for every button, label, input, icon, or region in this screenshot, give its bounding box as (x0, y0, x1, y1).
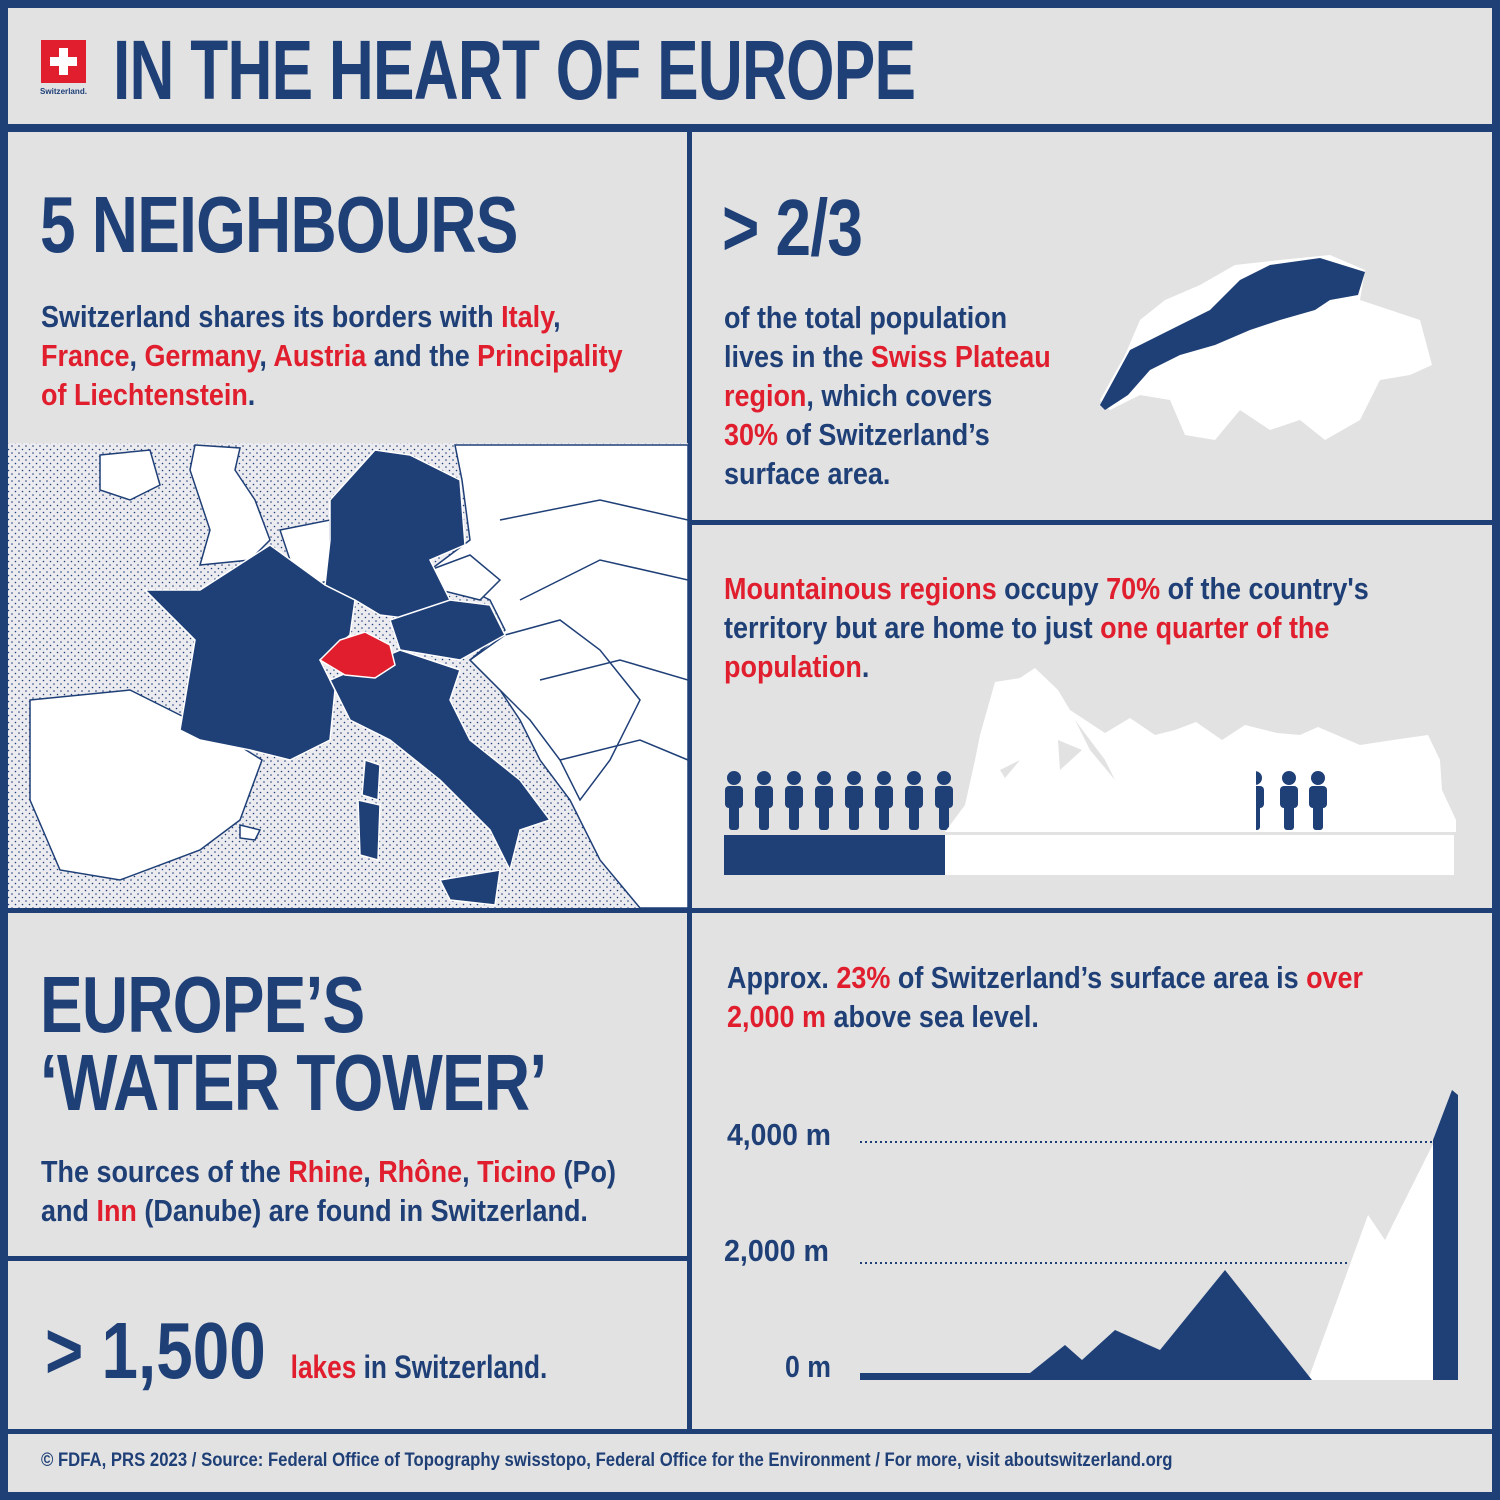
text: Swiss plateau: 30% of Switzerland’s (724, 417, 990, 452)
chart: elevation: 0 m (785, 1349, 831, 1384)
text: mountainous regions: Mountainous regions occupy 70% of the country's territory but are home to just one quarter of the population. (724, 571, 1369, 684)
stat: lakes: > 1,500 lakes in Switzerland. (45, 1306, 547, 1395)
heading: water tower: EUROPE’S (40, 960, 364, 1049)
text: Swiss plateau: of the total population (724, 300, 1007, 335)
logo: Swiss flag: Switzerland. (40, 87, 87, 96)
stat: > 2/3: > 2/3 (722, 183, 862, 272)
chart: elevation (724, 1090, 1458, 1384)
text: Swiss plateau: lives in the Swiss Plateau (724, 339, 1051, 374)
map: Switzerland with plateau (1100, 255, 1432, 440)
chart: elevation: 2,000 m (724, 1233, 829, 1268)
heading: water tower (40, 960, 546, 1127)
logo: Swiss flag (40, 40, 87, 96)
text: Swiss plateau: region, which covers (724, 378, 992, 413)
Switzerland red (320, 632, 395, 678)
text: Swiss plateau (724, 300, 1051, 491)
text: neighbours: Switzerland shares its borders with Italy, France, Germany, Austria and the Principality of Liechtenstein. (41, 299, 623, 412)
footer: source: © FDFA, PRS 2023 / Source: Federal Office of Topography swisstopo, Federal Office for the Environment / For more, visit aboutswitzerland.org (41, 1450, 1173, 1471)
text: altitude: Approx. 23% of Switzerland’s surface area is over 2,000 m above sea level. (727, 960, 1363, 1034)
text: Swiss plateau: surface area. (724, 456, 890, 491)
chart: elevation: 4,000 m (727, 1117, 831, 1152)
heading: 5 neighbours: 5 NEIGHBOURS (40, 180, 518, 269)
map of Europe (8, 443, 688, 908)
title: IN THE HEART OF EUROPE (113, 23, 915, 117)
text: river sources: The sources of the Rhine, Rhône, Ticino (Po) and Inn (Danube) are found in Switzerland. (41, 1154, 616, 1228)
heading: water tower: ‘WATER TOWER’ (40, 1038, 546, 1127)
chart: population vs mountains (724, 668, 1456, 875)
